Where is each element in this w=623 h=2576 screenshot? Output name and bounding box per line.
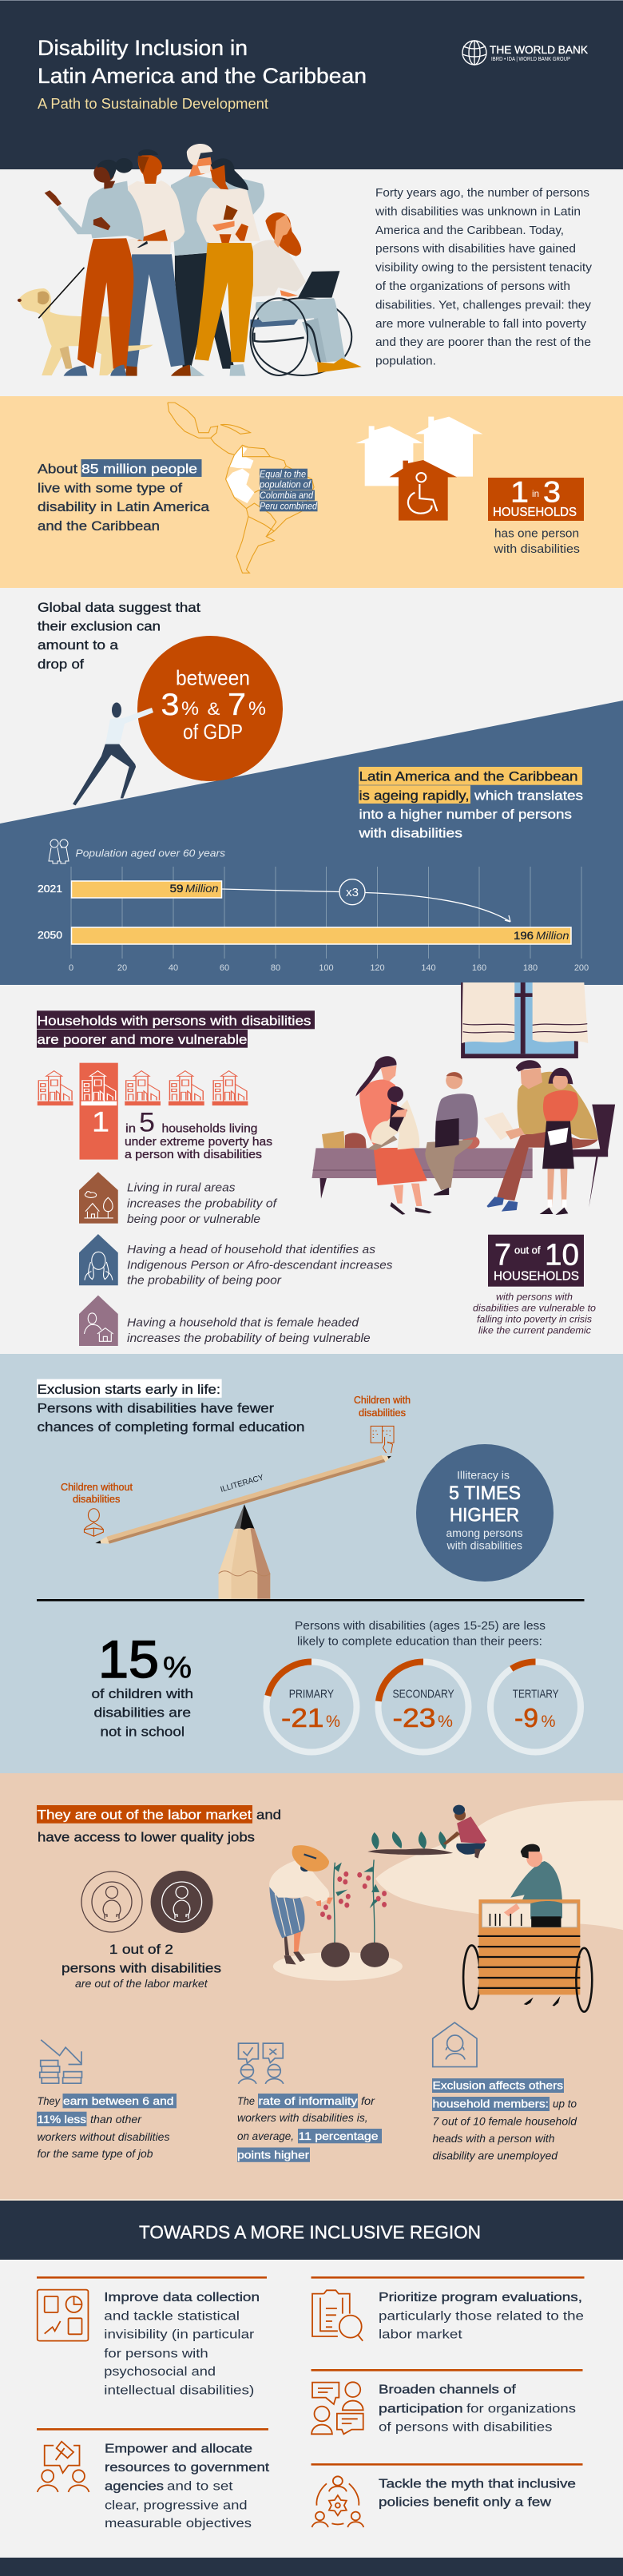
text block: household members: up to bbox=[553, 2098, 577, 2110]
label: children without disabilities: Children without bbox=[61, 1482, 133, 1493]
icon: houses with wheelchair symbol bbox=[355, 417, 482, 521]
stat: 7 out of 10 households: like the current pandemic bbox=[478, 1324, 591, 1336]
callout: between 3% and 7% of GDP bbox=[137, 636, 283, 781]
text block: 85 million people: live with some type of bbox=[38, 481, 182, 496]
stat: 15 percent of children not in school: 15 bbox=[98, 1629, 159, 1689]
text block: completion gap intro bbox=[295, 1620, 546, 1648]
soil with sprouts bbox=[367, 1832, 453, 1855]
callout: equal to the population of Colombia and Peru combined: Colombia and bbox=[260, 491, 314, 501]
recommendation: data collection: Improve data collection bbox=[104, 2291, 260, 2304]
bar chart: population aged over 60 years: 196 bbox=[514, 929, 534, 942]
chart: secondary -23%: -23 bbox=[393, 1703, 436, 1733]
bar chart: population aged over 60 years: 2021 bbox=[38, 883, 62, 895]
text block: informality bbox=[237, 2094, 382, 2162]
icon row: five households, one highlighted bbox=[38, 1063, 248, 1160]
recommendation: empower agencies: Empower and allocate bbox=[105, 2443, 252, 2456]
callout: between 3% and 7% of GDP: 7 bbox=[228, 688, 246, 722]
recommendation: tackle the myth: policies benefit only a few bbox=[379, 2496, 552, 2510]
recommendation: empower agencies bbox=[37, 2428, 270, 2530]
text block: rural areas: increases the probability of bbox=[127, 1198, 278, 1211]
title: Disability Inclusion in bbox=[38, 36, 248, 60]
text block: female headed: Having a household that is female headed bbox=[127, 1317, 359, 1330]
bench and chair bbox=[312, 1105, 615, 1208]
panel: exclusion starts early bbox=[37, 1379, 585, 1752]
person: woman in orange trousers bbox=[45, 158, 144, 376]
bar chart: population aged over 60 years: 200 bbox=[574, 963, 589, 973]
recommendation: empower agencies: agencies bbox=[105, 2480, 164, 2494]
stat: 1 out of 2 persons: persons with disabilities bbox=[62, 1961, 221, 1976]
stat: 15 percent of children not in school: % bbox=[163, 1651, 192, 1685]
callout: equal to the population of Colombia and Peru combined: Equal to the bbox=[260, 470, 306, 479]
recommendation: data collection: invisibility (in particular bbox=[104, 2328, 254, 2342]
heading: have access to lower quality jobs bbox=[38, 1830, 255, 1845]
arrow: x3 growth: x3 bbox=[346, 886, 359, 899]
stat: 1 in 5 households: in bbox=[125, 1122, 136, 1136]
icon: female headed house bbox=[79, 1296, 118, 1346]
callout: between 3% and 7% of GDP: 3 bbox=[161, 688, 179, 722]
text block: informality: on average, bbox=[237, 2129, 294, 2142]
heading bbox=[37, 1805, 281, 1845]
callout: between 3% and 7% of GDP: & bbox=[208, 699, 220, 719]
chart: primary -21%: PRIMARY bbox=[289, 1688, 334, 1701]
chart: secondary -23%: % bbox=[438, 1713, 453, 1731]
text block: 85 million people: disability in Latin America bbox=[38, 499, 210, 514]
icon: braille book bbox=[371, 1426, 394, 1453]
window with curtains bbox=[461, 982, 588, 1058]
text block: ageing rapidly: Latin America and the Caribbean bbox=[359, 769, 578, 784]
text block: rural areas bbox=[127, 1182, 278, 1226]
panel: towards a more inclusive region banner bbox=[0, 2201, 623, 2260]
icon: two person rings, 1 out of 2 bbox=[81, 1871, 213, 1933]
icon: child reading bbox=[84, 1509, 103, 1536]
stat: 1 in 3 households: 3 bbox=[543, 475, 561, 508]
icon: falling earnings bbox=[40, 2040, 81, 2083]
chart: secondary -23% bbox=[379, 1661, 468, 1752]
recommendation: program evaluations: labor market bbox=[379, 2328, 462, 2342]
text block: introduction: America and the Caribbean. Today, bbox=[375, 224, 564, 237]
recommendation: program evaluations bbox=[312, 2276, 585, 2342]
text block: household members: heads with a person with bbox=[433, 2132, 555, 2145]
illustration: pencil seesaw bbox=[95, 1455, 391, 1599]
bar chart: population aged over 60 years bbox=[38, 839, 589, 973]
text block: introduction: and they are poorer than the rest of the bbox=[375, 336, 591, 349]
heading: chances of completing formal education bbox=[37, 1419, 304, 1435]
heading: They are out of the labor market bbox=[37, 1808, 252, 1823]
label: illiteracy: ILLITERACY bbox=[220, 1473, 265, 1494]
stat: 1 in 3 households: 1 bbox=[510, 475, 529, 508]
text block: global data: their exclusion can bbox=[38, 618, 161, 633]
bar chart: population aged over 60 years: 20 bbox=[117, 963, 127, 973]
recommendation: tackle the myth: Tackle the myth that inclusive bbox=[379, 2477, 576, 2491]
person: woman in amber trousers bbox=[190, 158, 260, 376]
label: children with disabilities: disabilities bbox=[359, 1407, 406, 1419]
icon: rural house bbox=[79, 1172, 118, 1224]
text block: earnings: 11% less bbox=[37, 2113, 86, 2125]
stat: 7 out of 10 households: falling into poverty in crisis bbox=[477, 1314, 592, 1325]
bar chart: population aged over 60 years: 60 bbox=[220, 963, 229, 973]
text block: introduction: visibility owing to the persistent tenacity bbox=[375, 262, 593, 275]
stat: 15 percent of children not in school bbox=[91, 1629, 193, 1739]
callout: equal to the population of Colombia and Peru combined: population of bbox=[259, 480, 312, 490]
text block: introduction: population. bbox=[375, 355, 436, 368]
text block: household members: household members: bbox=[433, 2098, 549, 2110]
text block: earnings bbox=[37, 2094, 177, 2160]
heading: Exclusion starts early in life: bbox=[37, 1382, 220, 1397]
text block: 85 million people bbox=[38, 459, 210, 534]
logo: the world bank: IBRD • IDA | WORLD BANK GROUP bbox=[491, 55, 570, 62]
text block: female headed bbox=[127, 1317, 371, 1345]
text block: indigenous or afro-descendant: Having a head of household that identifies as bbox=[127, 1244, 375, 1256]
callout: illiteracy 5 times higher: Illiteracy is bbox=[457, 1469, 510, 1482]
chart: tertiary -9% bbox=[490, 1661, 581, 1752]
stat: 1 in 5 households: a person with disabilities bbox=[125, 1148, 262, 1161]
stat: 7 out of 10 households: out of bbox=[514, 1244, 541, 1256]
stat: 1 out of 2 persons: 1 out of 2 bbox=[109, 1942, 173, 1957]
stat: 15 percent of children not in school: of children with bbox=[91, 1686, 193, 1701]
stat: 7 out of 10 households: disabilities are vulnerable to bbox=[473, 1303, 596, 1314]
text block: informality: for bbox=[361, 2094, 375, 2107]
label: children without disabilities: disabilities bbox=[73, 1494, 120, 1505]
heading: are poorer and more vulnerable bbox=[37, 1032, 248, 1047]
stat: 1 in 5 households bbox=[92, 1107, 272, 1161]
heading bbox=[37, 1010, 315, 1048]
stat: 15 percent of children not in school: disabilities are bbox=[94, 1705, 191, 1721]
recommendation: program evaluations: Prioritize program evaluations, bbox=[379, 2291, 582, 2304]
bar chart: population aged over 60 years: 0 bbox=[69, 963, 73, 973]
recommendation: data collection: psychosocial and bbox=[104, 2365, 216, 2379]
bar chart: population aged over 60 years: 140 bbox=[421, 963, 436, 973]
recommendation: data collection: for persons with bbox=[104, 2348, 208, 2361]
label: children with disabilities: Children with bbox=[354, 1395, 411, 1406]
bar chart: population aged over 60 years: 40 bbox=[169, 963, 178, 973]
text block: earnings: than other bbox=[90, 2113, 142, 2125]
person planting bbox=[443, 1805, 486, 1859]
bar chart: population aged over 60 years: Population aged over 60 years bbox=[75, 847, 226, 859]
icon: speech bubbles and people, informality bbox=[238, 2043, 284, 2084]
text block: informality: 11 percentage bbox=[299, 2129, 379, 2142]
callout: equal to the population of Colombia and Peru combined: Peru combined bbox=[260, 502, 318, 511]
text block: earnings: workers without disabilities bbox=[37, 2130, 170, 2143]
callout: illiteracy 5 times higher: among persons bbox=[446, 1526, 522, 1539]
stat: 7 out of 10 households: 7 bbox=[494, 1238, 511, 1272]
recommendation: empower agencies: resources to government bbox=[105, 2461, 270, 2475]
chart: tertiary -9%: % bbox=[542, 1713, 556, 1731]
text block: ageing rapidly bbox=[358, 767, 583, 840]
text block: introduction bbox=[375, 187, 593, 368]
heading: and bbox=[256, 1808, 281, 1823]
text block: female headed: increases the probability of being vulnerable bbox=[127, 1332, 371, 1345]
text block: indigenous or afro-descendant: the probability of being poor bbox=[127, 1275, 282, 1288]
text block: ageing rapidly: into a higher number of persons bbox=[359, 807, 572, 822]
logo: the world bank bbox=[462, 41, 589, 65]
callout: illiteracy 5 times higher: with disabilities bbox=[446, 1538, 522, 1551]
recommendation: broaden channels bbox=[312, 2369, 583, 2435]
title: Latin America and the Caribbean bbox=[38, 64, 367, 88]
text block: introduction: with disabilities was unknown in Latin bbox=[375, 205, 581, 218]
text block: introduction: Forty years ago, the number of persons bbox=[375, 187, 589, 200]
text block: ageing rapidly: which translates bbox=[474, 788, 583, 804]
vendor with cart bbox=[463, 1844, 592, 2012]
plants with berries bbox=[320, 1860, 389, 1967]
icon: dog with leash bbox=[18, 268, 153, 375]
panel: 85 million people bbox=[38, 403, 584, 573]
icon: indigenous person house bbox=[79, 1234, 118, 1285]
icon: older couple bbox=[49, 839, 69, 863]
stat: 1 out of 2 persons: are out of the labor market bbox=[75, 1978, 208, 1990]
bar chart: population aged over 60 years: 120 bbox=[370, 963, 385, 973]
text block: household members: disability are unemployed bbox=[433, 2149, 558, 2161]
illustration: farm and street vendor bbox=[269, 1800, 623, 2012]
text block: earnings: They bbox=[37, 2094, 61, 2107]
chart: primary -21%: % bbox=[326, 1713, 340, 1731]
stat: 1 in 5 households: households living bbox=[161, 1122, 257, 1136]
bar chart: population aged over 60 years: 100 bbox=[319, 963, 334, 973]
arrow: x3 growth bbox=[222, 879, 510, 922]
stat: 7 out of 10 households bbox=[473, 1235, 596, 1336]
heading: Households with persons with disabilities bbox=[37, 1013, 312, 1028]
stat: 1 out of 2 persons bbox=[62, 1942, 221, 1990]
subtitle: A Path to Sustainable Development bbox=[38, 96, 268, 112]
text block: introduction: of the organizations of persons with bbox=[375, 280, 570, 293]
stat: 1 in 3 households: in bbox=[532, 488, 539, 499]
recommendation: broaden channels: participation bbox=[379, 2403, 463, 2416]
stat: 1 in 3 households: has one person bbox=[494, 528, 579, 541]
text block: informality: rate of informality bbox=[259, 2094, 358, 2107]
stat: 1 in 3 households: HOUSEHOLDS bbox=[493, 506, 577, 519]
recommendation: broaden channels: of persons with disabilities bbox=[379, 2421, 553, 2435]
text block: global data: drop of bbox=[38, 657, 84, 672]
chart: tertiary -9%: TERTIARY bbox=[513, 1688, 559, 1701]
recommendation: data collection bbox=[37, 2276, 267, 2398]
text block: introduction: are more vulnerable to fall into poverty bbox=[375, 318, 587, 331]
text block: informality: points higher bbox=[237, 2149, 309, 2161]
chart: primary -21%: -21 bbox=[281, 1703, 324, 1733]
recommendation: data collection: intellectual disabilities) bbox=[104, 2384, 254, 2398]
text block: ageing rapidly: with disabilities bbox=[358, 825, 462, 840]
stat: 7 out of 10 households: 10 bbox=[545, 1238, 579, 1272]
text block: ageing rapidly: is ageing rapidly, bbox=[359, 788, 470, 804]
illustration: family on bench under window bbox=[312, 982, 615, 1215]
recommendation: empower agencies: measurable objectives bbox=[105, 2517, 252, 2530]
panel: economic cost slope bbox=[0, 701, 623, 985]
bar chart: population aged over 60 years: Million bbox=[185, 882, 219, 895]
stat: 1 in 5 households: 1 bbox=[92, 1107, 109, 1138]
recommendation: broaden channels: for organizations bbox=[466, 2403, 576, 2416]
boy with bag bbox=[425, 1072, 479, 1196]
logo: the world bank: THE WORLD BANK bbox=[490, 43, 589, 56]
text block: earnings: earn between 6 and bbox=[63, 2094, 174, 2107]
text block: 85 million people: 85 million people bbox=[81, 462, 197, 477]
bar chart: population aged over 60 years: Million bbox=[536, 929, 569, 942]
text block: informality: workers with disabilities is, bbox=[237, 2111, 368, 2124]
woman with hat bbox=[269, 1845, 333, 1964]
stat: 1 in 3 households bbox=[488, 475, 584, 556]
footer bar bbox=[0, 2558, 623, 2576]
text block: introduction: persons with disabilities have gained bbox=[375, 243, 576, 256]
panel: header bbox=[0, 0, 623, 169]
recommendation: empower agencies: clear, progressive and bbox=[105, 2499, 248, 2512]
recommendation: data collection: and tackle statistical bbox=[104, 2309, 240, 2323]
text block: 85 million people: and the Caribbean bbox=[38, 518, 160, 534]
text block: indigenous or afro-descendant bbox=[127, 1244, 393, 1288]
text block: earnings: for the same type of job bbox=[37, 2147, 153, 2160]
text block: completion gap intro: likely to complete education than their peers: bbox=[297, 1635, 542, 1648]
text block: rural areas: being poor or vulnerable bbox=[127, 1213, 260, 1226]
stat: 1 in 5 households: under extreme poverty has bbox=[125, 1135, 272, 1149]
recommendation: tackle the myth bbox=[312, 2463, 583, 2527]
text block: household members: Exclusion affects others bbox=[433, 2079, 563, 2092]
panel: households poorer and more vulnerable bbox=[37, 982, 615, 1346]
label: children without disabilities bbox=[61, 1482, 133, 1505]
bar chart: population aged over 60 years: 160 bbox=[472, 963, 486, 973]
recommendation: broaden channels: Broaden channels of bbox=[379, 2383, 517, 2397]
icon: house with person bbox=[433, 2022, 477, 2067]
callout: between 3% and 7% of GDP: % bbox=[248, 698, 266, 720]
stat: 1 in 3 households: with disabilities bbox=[493, 543, 580, 556]
girl bbox=[540, 1068, 578, 1215]
text block: rural areas: Living in rural areas bbox=[127, 1182, 235, 1195]
panel: labor market bbox=[37, 1800, 623, 2162]
text block: global data bbox=[38, 600, 200, 672]
callout: between 3% and 7% of GDP: % bbox=[181, 698, 199, 720]
mother and child bbox=[355, 1056, 432, 1215]
recommendation: empower agencies: and to set bbox=[167, 2480, 233, 2494]
person: tall man bbox=[171, 144, 264, 376]
text block: global data: amount to a bbox=[38, 637, 119, 653]
text block: informality: The bbox=[237, 2094, 255, 2107]
chart: secondary -23%: SECONDARY bbox=[393, 1688, 454, 1701]
title bbox=[38, 36, 367, 88]
bar chart: population aged over 60 years: 80 bbox=[271, 963, 280, 973]
father with document bbox=[484, 1060, 598, 1212]
callout: between 3% and 7% of GDP: of GDP bbox=[183, 720, 243, 744]
chart: primary -21% bbox=[267, 1661, 356, 1752]
illustration: group of people with dog and wheelchair user bbox=[18, 144, 362, 376]
heading bbox=[37, 1379, 304, 1435]
panel: towards a more inclusive region banner: TOWARDS A MORE INCLUSIVE REGION bbox=[139, 2222, 481, 2243]
text block: indigenous or afro-descendant: Indigenous Person or Afro-descendant increases bbox=[127, 1259, 393, 1272]
text block: completion gap intro: Persons with disabilities (ages 15-25) are less bbox=[295, 1620, 546, 1633]
bar chart: population aged over 60 years: 59 bbox=[169, 882, 184, 895]
bar chart: population aged over 60 years: 180 bbox=[523, 963, 538, 973]
text block: household members bbox=[432, 2078, 577, 2161]
icon: person pushing circle uphill bbox=[73, 703, 153, 805]
stat: 7 out of 10 households: with persons with bbox=[496, 1292, 573, 1303]
text block: household members: 7 out of 10 female household bbox=[433, 2115, 577, 2128]
text block: introduction: disabilities. Yet, challenges prevail: they bbox=[375, 299, 592, 312]
callout: illiteracy 5 times higher bbox=[416, 1444, 554, 1582]
map: Latin America with Colombia and Peru in white bbox=[168, 403, 314, 573]
callout: equal to the population of Colombia and Peru combined bbox=[259, 469, 318, 511]
recommendation: program evaluations: particularly those related to the bbox=[379, 2309, 584, 2323]
callout: illiteracy 5 times higher: HIGHER bbox=[450, 1505, 519, 1526]
stat: 1 in 5 households: 5 bbox=[139, 1108, 155, 1138]
text block: global data: Global data suggest that bbox=[38, 600, 200, 615]
stat: 15 percent of children not in school: not in school bbox=[101, 1724, 185, 1739]
chart: tertiary -9%: -9 bbox=[514, 1703, 538, 1733]
stat: 7 out of 10 households: HOUSEHOLDS bbox=[494, 1270, 579, 1284]
person: woman in wheelchair with laptop bbox=[250, 212, 362, 375]
person: man in cream sweater bbox=[125, 149, 185, 376]
callout: illiteracy 5 times higher: 5 TIMES bbox=[449, 1482, 521, 1504]
callout: between 3% and 7% of GDP: between bbox=[176, 666, 250, 690]
label: children with disabilities bbox=[354, 1395, 411, 1419]
panel: recommendations bbox=[37, 2276, 585, 2530]
bar chart: population aged over 60 years: 2050 bbox=[38, 929, 62, 941]
heading: Persons with disabilities have fewer bbox=[37, 1400, 274, 1415]
text block: 85 million people: About bbox=[38, 462, 77, 477]
